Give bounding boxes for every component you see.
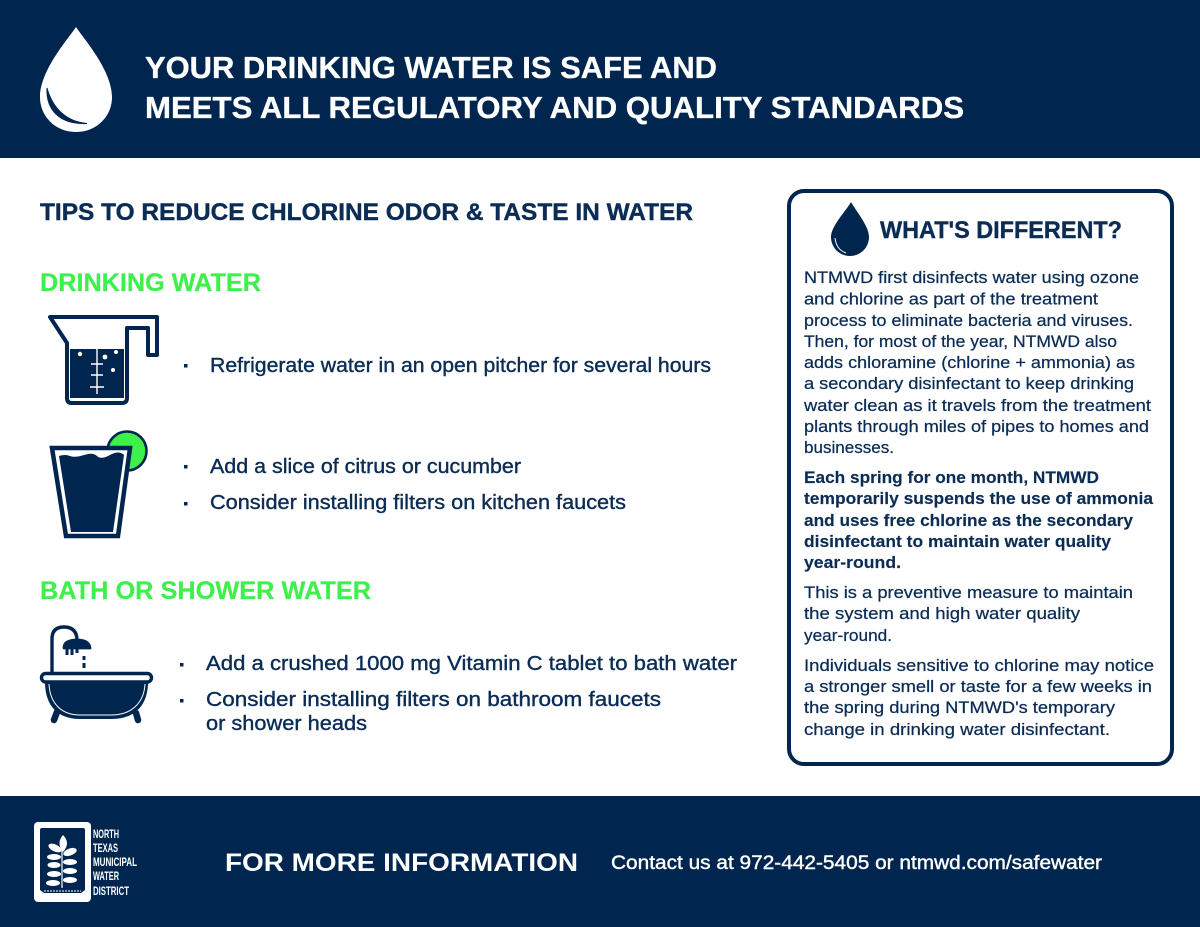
- paragraph: sensitive individuals: a stronger smell or taste for a few weeks in: [804, 677, 1152, 696]
- panel heading: WHAT'S DIFFERENT?: [880, 217, 1122, 244]
- tip: bathroom filters: Consider installing filters on bathroom faucets: [206, 689, 661, 711]
- paragraph: spring change (bold): [804, 468, 1154, 572]
- tip: vitamin c: Add a crushed 1000 mg Vitamin C tablet to bath water: [206, 653, 737, 675]
- tip: citrus: Add a slice of citrus or cucumber: [210, 456, 521, 478]
- paragraph: disinfection process: Then, for most of the year, NTMWD also: [804, 332, 1117, 351]
- paragraph: spring change (bold): disinfectant to maintain water quality: [804, 532, 1112, 551]
- icon: navy water drop: [831, 202, 869, 256]
- paragraph: spring change (bold): and uses free chlorine as the secondary: [804, 511, 1134, 530]
- paragraph: disinfection process: plants through miles of pipes to homes and: [804, 417, 1149, 436]
- paragraph: disinfection process: NTMWD first disinfects water using ozone: [804, 268, 1139, 287]
- paragraph: sensitive individuals: Individuals sensitive to chlorine may notice: [804, 656, 1154, 675]
- contact information: Contact us at 972-442-5405 or ntmwd.com/safewater: [611, 853, 1103, 874]
- footer banner: [0, 796, 1200, 927]
- paragraph: sensitive individuals: the spring during NTMWD's temporary: [804, 698, 1116, 717]
- tip: refrigerate: Refrigerate water in an open pitcher for several hours: [210, 355, 711, 377]
- logo wordmark: WATER: [93, 871, 119, 883]
- paragraph: disinfection process: adds chloramine (chlorine + ammonia) as: [804, 353, 1135, 372]
- tip: bathroom filters: or shower heads: [206, 713, 367, 735]
- tip: kitchen filters: Consider installing filters on kitchen faucets: [210, 492, 626, 514]
- header title: [145, 51, 964, 125]
- paragraph: preventive measure: This is a preventive measure to maintain: [804, 583, 1133, 602]
- paragraph: disinfection process: a secondary disinfectant to keep drinking: [804, 374, 1134, 393]
- logo wordmark: DISTRICT: [93, 886, 129, 898]
- paragraph: preventive measure: the system and high water quality: [804, 604, 1081, 623]
- paragraph: disinfection process: businesses.: [804, 438, 894, 457]
- header title: YOUR DRINKING WATER IS SAFE AND: [145, 51, 717, 85]
- icon: measuring pitcher: [50, 317, 157, 403]
- paragraph: disinfection process: and chlorine as part of the treatment: [804, 290, 1098, 308]
- paragraph: disinfection process: water clean as it travels from the treatment: [803, 396, 1151, 415]
- header title: MEETS ALL REGULATORY AND QUALITY STANDARDS: [145, 91, 964, 125]
- paragraph: sensitive individuals: [804, 656, 1154, 739]
- logo wordmark: TEXAS: [93, 843, 118, 855]
- paragraph: spring change (bold): year-round.: [804, 553, 901, 572]
- logo wordmark: MUNICIPAL: [93, 857, 137, 869]
- paragraph: disinfection process: [803, 268, 1151, 457]
- footer heading: FOR MORE INFORMATION: [225, 849, 578, 877]
- tip: bathroom filters: [180, 689, 661, 735]
- heading: drinking water: DRINKING WATER: [40, 269, 261, 297]
- heading: bath or shower water: BATH OR SHOWER WATER: [40, 577, 371, 605]
- icon: white water drop: [40, 27, 112, 132]
- paragraph: preventive measure: [804, 583, 1133, 645]
- paragraph: disinfection process: process to eliminate bacteria and viruses.: [804, 311, 1133, 330]
- icon: bathtub with faucet: [42, 627, 152, 720]
- paragraph: spring change (bold): temporarily suspends the use of ammonia: [804, 489, 1154, 508]
- paragraph: spring change (bold): Each spring for one month, NTMWD: [804, 468, 1099, 487]
- header banner: [0, 0, 1200, 158]
- logo: NTMWD: [34, 822, 137, 902]
- logo wordmark: NORTH: [93, 829, 119, 841]
- heading: tips: TIPS TO REDUCE CHLORINE ODOR & TASTE IN WATER: [40, 199, 693, 226]
- icon: glass with citrus slice: [52, 432, 146, 536]
- paragraph: sensitive individuals: change in drinking water disinfectant.: [804, 720, 1110, 739]
- logo wordmark: [93, 829, 137, 898]
- panel: what's different: [789, 191, 1172, 764]
- paragraph: preventive measure: year-round.: [804, 626, 892, 645]
